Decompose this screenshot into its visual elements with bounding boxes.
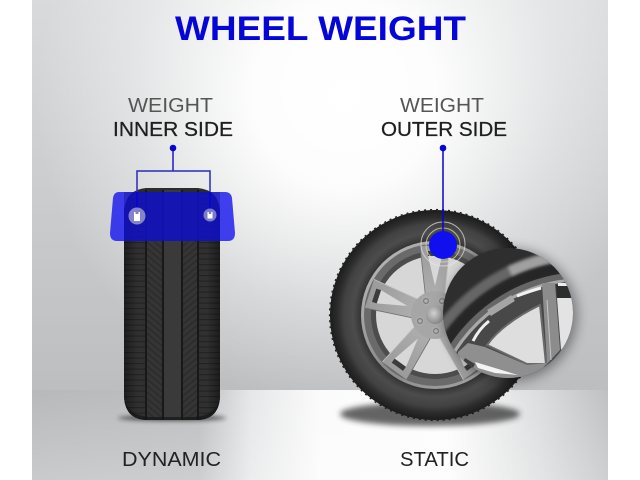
background wall xyxy=(32,0,608,390)
magnifier lens xyxy=(443,248,573,378)
background floor xyxy=(32,390,608,480)
shadow under side wheel xyxy=(340,402,520,426)
shadow under front tire xyxy=(118,415,226,421)
label: dynamic: DYNAMIC xyxy=(122,449,221,471)
lens: tire bands xyxy=(443,254,564,350)
label: weight inner side: WEIGHT xyxy=(128,94,213,117)
label: weight outer side: OUTER SIDE xyxy=(381,119,507,141)
hub xyxy=(411,291,459,339)
outer weight blue marker xyxy=(429,231,457,259)
label: weight inner side xyxy=(113,94,233,141)
icon: inner weight left xyxy=(128,208,146,224)
lens: right window xyxy=(556,283,573,350)
label: weight outer side: WEIGHT xyxy=(400,94,484,117)
rim xyxy=(361,241,509,389)
blue panel tire tint xyxy=(124,192,220,241)
blue highlight panel over tire xyxy=(110,192,235,241)
label: static: STATIC xyxy=(400,449,469,471)
lens: spokes xyxy=(458,283,560,380)
connector dot xyxy=(440,145,446,151)
magnifier shadow xyxy=(445,249,577,381)
outer side connector xyxy=(442,148,444,245)
label: weight outer side xyxy=(381,94,507,141)
bracket dot xyxy=(170,145,176,151)
target rings xyxy=(421,222,465,266)
side view wheel xyxy=(330,210,540,420)
tire xyxy=(330,210,540,420)
front view tire (tread) xyxy=(124,188,220,420)
lens: rim xyxy=(454,280,566,378)
title: WHEEL WEIGHT xyxy=(175,10,466,48)
inner side bracket connector xyxy=(137,148,210,210)
spokes xyxy=(365,246,505,380)
lens: window xyxy=(487,305,546,364)
label: weight inner side: INNER SIDE xyxy=(113,119,233,141)
icon: inner weight right xyxy=(204,208,216,222)
